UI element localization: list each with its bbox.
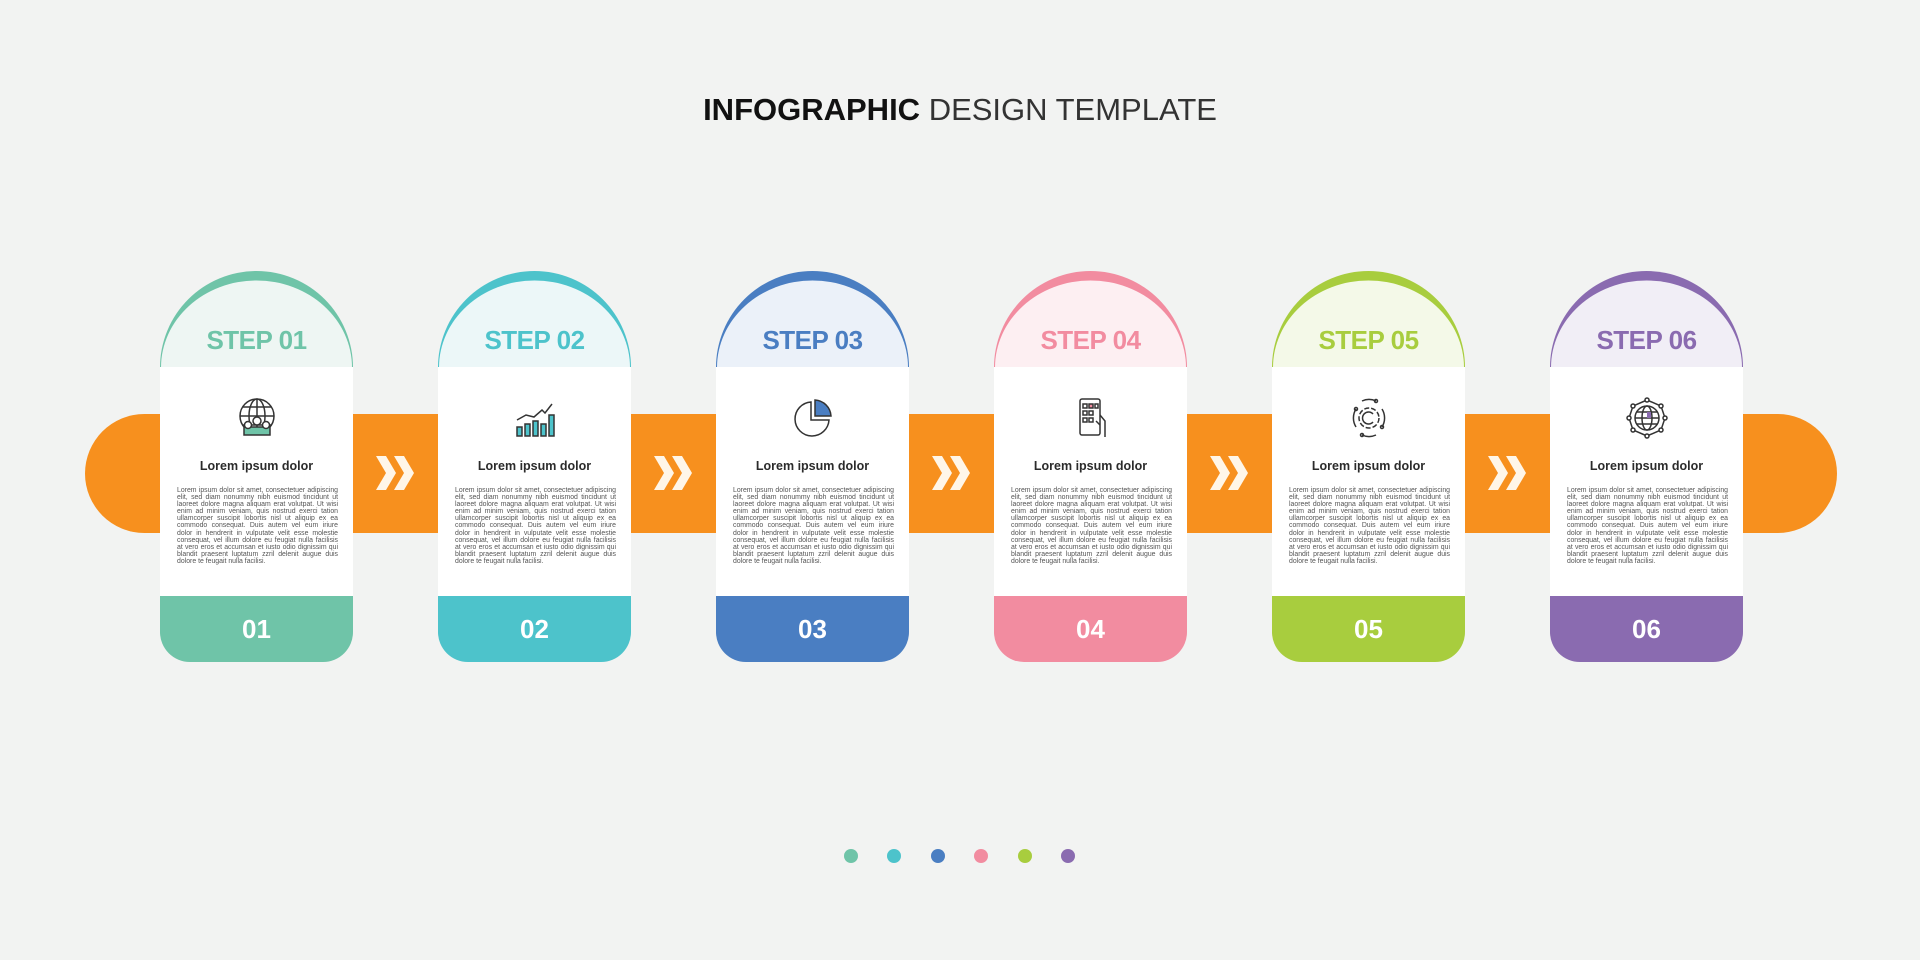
footer: 01: 01 [242,614,271,644]
icon: network globe [1626,397,1668,439]
heading: step 04: STEP 04 [1040,325,1141,355]
text: heading: Lorem ipsum dolor [200,459,313,473]
icon: gear [1352,398,1386,438]
text: body: Lorem ipsum dolor sit amet, consectetuer adipiscing elit, sed diam nonummy nibh euismod tincidunt ut laoreet dolore magna aliquam erat volutpat. Ut wisi enim ad minim veniam, quis nostrud exerci tation ullamcorper suscipit lobortis nisl ut aliquip ex ea commodo consequat. Duis autem vel eum iriure dolor in hendrerit in vulputate velit esse molestie consequat, vel illum dolore eu feugiat nulla facilisis at vero eros et accumsan et iusto odio dignissim qui blandit praesent luptatum zzril delenit augue duis dolore te feugait nulla facilisi. [177,487,338,565]
text: heading: Lorem ipsum dolor [1312,459,1425,473]
footer: 05 [1272,596,1465,662]
footer: 01 [160,596,353,662]
heading: step 05: STEP 05 [1318,325,1419,355]
text: heading: Lorem ipsum dolor [478,459,591,473]
icon: globe people [239,398,275,436]
panel: step 05 [1272,271,1465,662]
chevron 1 [376,456,414,490]
footer: 06: 06 [1632,614,1661,644]
heading: step 02: STEP 02 [484,325,585,355]
text: heading: Lorem ipsum dolor [1590,459,1703,473]
icon: pie chart [794,399,832,437]
footer: 03 [716,596,909,662]
text: body: Lorem ipsum dolor sit amet, consectetuer adipiscing elit, sed diam nonummy nibh euismod tincidunt ut laoreet dolore magna aliquam erat volutpat. Ut wisi enim ad minim veniam, quis nostrud exerci tation ullamcorper suscipit lobortis nisl ut aliquip ex ea commodo consequat. Duis autem vel eum iriure dolor in hendrerit in vulputate velit esse molestie consequat, vel illum dolore eu feugiat nulla facilisis at vero eros et accumsan et iusto odio dignissim qui blandit praesent luptatum zzril delenit augue duis dolore te feugait nulla facilisi. [1289,487,1450,565]
heading: step 03: STEP 03 [762,325,863,355]
footer: 04: 04 [1076,614,1105,644]
footer: 02 [438,596,631,662]
heading: step 06: STEP 06 [1596,325,1697,355]
text: heading: Lorem ipsum dolor [756,459,869,473]
chevron 5 [1488,456,1526,490]
footer: 04 [994,596,1187,662]
chevron 2 [654,456,692,490]
text: body: Lorem ipsum dolor sit amet, consectetuer adipiscing elit, sed diam nonummy nibh euismod tincidunt ut laoreet dolore magna aliquam erat volutpat. Ut wisi enim ad minim veniam, quis nostrud exerci tation ullamcorper suscipit lobortis nisl ut aliquip ex ea commodo consequat. Duis autem vel eum iriure dolor in hendrerit in vulputate velit esse molestie consequat, vel illum dolore eu feugiat nulla facilisis at vero eros et accumsan et iusto odio dignissim qui blandit praesent luptatum zzril delenit augue duis dolore te feugait nulla facilisi. [455,487,616,565]
icon: phone in hand [1079,398,1106,437]
footer: 05: 05 [1354,614,1383,644]
heading: step 01: STEP 01 [206,325,307,355]
text: body: Lorem ipsum dolor sit amet, consectetuer adipiscing elit, sed diam nonummy nibh euismod tincidunt ut laoreet dolore magna aliquam erat volutpat. Ut wisi enim ad minim veniam, quis nostrud exerci tation ullamcorper suscipit lobortis nisl ut aliquip ex ea commodo consequat. Duis autem vel eum iriure dolor in hendrerit in vulputate velit esse molestie consequat, vel illum dolore eu feugiat nulla facilisis at vero eros et accumsan et iusto odio dignissim qui blandit praesent luptatum zzril delenit augue duis dolore te feugait nulla facilisi. [733,487,894,565]
panel: step 03 [716,271,909,662]
chevron 4 [1210,456,1248,490]
orange band [85,414,1837,533]
chevron 3 [932,456,970,490]
icon: bar chart [516,404,555,437]
text: body: Lorem ipsum dolor sit amet, consectetuer adipiscing elit, sed diam nonummy nibh euismod tincidunt ut laoreet dolore magna aliquam erat volutpat. Ut wisi enim ad minim veniam, quis nostrud exerci tation ullamcorper suscipit lobortis nisl ut aliquip ex ea commodo consequat. Duis autem vel eum iriure dolor in hendrerit in vulputate velit esse molestie consequat, vel illum dolore eu feugiat nulla facilisis at vero eros et accumsan et iusto odio dignissim qui blandit praesent luptatum zzril delenit augue duis dolore te feugait nulla facilisi. [1011,487,1172,565]
panel: step 02 [438,271,631,662]
text: heading: Lorem ipsum dolor [1034,459,1147,473]
footer: 06 [1550,596,1743,662]
panel: step 04 [994,271,1187,662]
panel: step 01 [160,271,353,662]
panel: step 06 [1550,271,1743,662]
dots legend [844,849,1075,863]
text: body: Lorem ipsum dolor sit amet, consectetuer adipiscing elit, sed diam nonummy nibh euismod tincidunt ut laoreet dolore magna aliquam erat volutpat. Ut wisi enim ad minim veniam, quis nostrud exerci tation ullamcorper suscipit lobortis nisl ut aliquip ex ea commodo consequat. Duis autem vel eum iriure dolor in hendrerit in vulputate velit esse molestie consequat, vel illum dolore eu feugiat nulla facilisis at vero eros et accumsan et iusto odio dignissim qui blandit praesent luptatum zzril delenit augue duis dolore te feugait nulla facilisi. [1567,487,1728,565]
title: INFOGRAPHIC DESIGN TEMPLATE [703,92,1217,127]
footer: 02: 02 [520,614,549,644]
footer: 03: 03 [798,614,827,644]
